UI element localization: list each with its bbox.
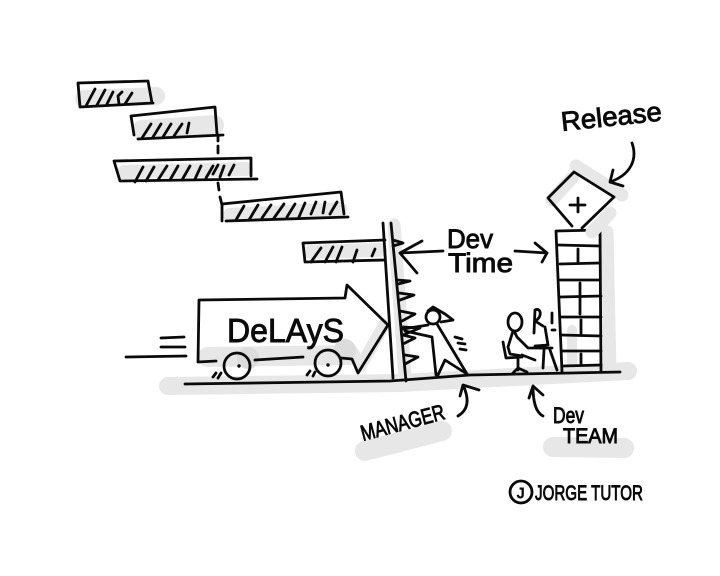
speed lines [126,337,186,357]
truck wheels [224,350,341,379]
motion lines [455,337,466,350]
wheel dust [213,371,315,378]
wall post with spikes [383,223,420,381]
manager figure [403,307,467,375]
body [508,331,543,360]
task bar 3 [114,158,257,182]
dev time label with arrows: Dev [447,224,493,254]
arm and body [403,324,467,375]
release diamond [548,166,622,232]
release label with arrow: Release [559,97,663,137]
dependency dashed line [218,135,222,205]
ground shadow [168,371,628,386]
dev time label with arrows: Time [448,248,513,278]
head [426,310,440,324]
arrow to column [515,243,547,262]
dev team label with arrow: TEAM [563,425,618,448]
brick column [556,230,610,372]
gantt chart tasks [78,81,385,262]
chair [503,342,527,373]
author signature: JORGE TUTOR [535,482,643,505]
task bar 2 [131,107,223,139]
head [508,313,522,331]
task bar 5 [303,240,385,262]
dev time label with arrows [400,224,547,278]
hair [428,307,453,322]
arrow to post [400,241,443,273]
ground line [185,372,620,384]
author signature [510,481,643,505]
delays truck arrow [126,285,388,379]
label: delays: DeLAyS [227,312,344,349]
desk and monitor [535,327,557,370]
dev team label with arrow: Dev [553,403,584,428]
author signature: J [517,485,524,502]
exclamation [552,313,555,330]
dev team label with arrow [529,386,624,448]
developer at desk [503,309,557,373]
spikes [393,240,420,364]
manager label with arrow: MANAGER [358,399,447,446]
thought character [534,309,543,333]
task bar 4 [222,192,348,221]
release label with arrow [559,97,663,186]
task bar 1 [78,81,156,107]
plus sign [570,198,585,212]
